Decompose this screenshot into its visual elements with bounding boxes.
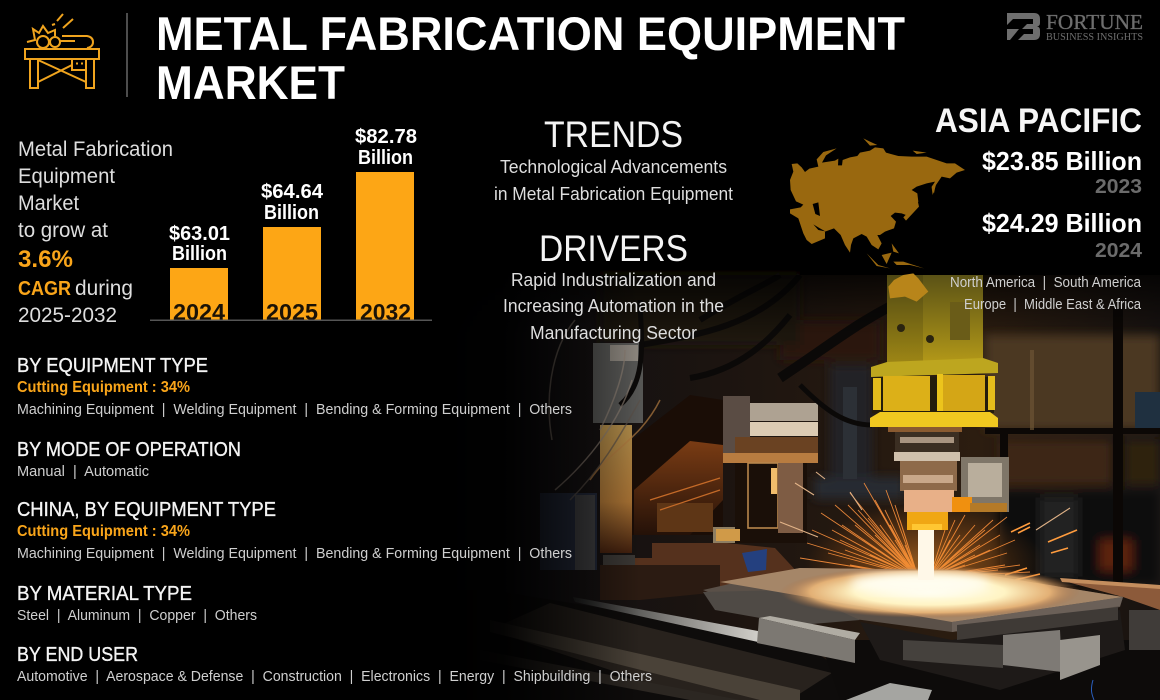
regional stats bbox=[935, 102, 1143, 313]
segment: by mode of operation: Manual | Automatic bbox=[17, 464, 149, 480]
sparks bbox=[780, 472, 1070, 577]
segment: by end user bbox=[17, 644, 652, 685]
base rails bbox=[440, 565, 1160, 700]
regional stats: 2023 bbox=[1095, 176, 1142, 198]
bar chart bbox=[150, 126, 432, 325]
trends bbox=[494, 114, 733, 204]
spark halo bbox=[805, 505, 1045, 625]
regional stats: ASIA PACIFIC bbox=[935, 102, 1142, 140]
text: market growth summary bbox=[18, 138, 173, 327]
photo: laser cutting machine bbox=[430, 275, 1160, 700]
bar chart: 2025 bbox=[266, 299, 318, 325]
logo: Fortune Business Insights: BUSINESS INSIGHTS bbox=[1046, 31, 1143, 43]
table under plate bbox=[757, 607, 1160, 700]
bar chart: $63.01 bbox=[169, 223, 230, 245]
drivers: Rapid Industrialization and bbox=[511, 270, 716, 290]
bar chart: $64.64 bbox=[261, 181, 324, 203]
segment: by equipment type bbox=[17, 355, 572, 418]
text: market growth summary: Market bbox=[18, 192, 79, 215]
segment: China by equipment type: Machining Equipment | Welding Equipment | Bending & Forming Equipment | Others bbox=[17, 546, 572, 562]
cables bbox=[620, 275, 907, 425]
title: MARKET bbox=[156, 56, 345, 109]
bar chart: 2024 bbox=[173, 299, 225, 325]
text: market growth summary: during bbox=[75, 277, 133, 300]
yellow laser head bbox=[870, 275, 1009, 580]
segment: by mode of operation bbox=[17, 439, 241, 480]
regional stats: $23.85 Billion bbox=[982, 146, 1142, 176]
bar chart: $82.78 bbox=[355, 126, 417, 148]
trends: in Metal Fabrication Equipment bbox=[494, 184, 733, 204]
trends: TRENDS bbox=[544, 114, 683, 155]
map: Asia Pacific bbox=[790, 138, 965, 302]
text: market growth summary: to grow at bbox=[18, 219, 108, 242]
trends: Technological Advancements bbox=[500, 157, 727, 177]
logo: Fortune Business Insights bbox=[1007, 10, 1143, 43]
regional stats: Europe | Middle East & Africa bbox=[964, 297, 1142, 313]
segment: by material type: BY MATERIAL TYPE bbox=[17, 583, 192, 605]
text: market growth summary: CAGR bbox=[18, 278, 71, 300]
left machine body bbox=[540, 343, 818, 597]
drivers: Manufacturing Sector bbox=[530, 323, 697, 343]
segment: by material type bbox=[17, 583, 257, 624]
regional stats: $24.29 Billion bbox=[982, 208, 1142, 238]
text: market growth summary: Metal Fabrication bbox=[18, 138, 173, 161]
top fade bbox=[430, 275, 1160, 335]
divider bbox=[126, 13, 128, 97]
regional stats: North America | South America bbox=[950, 275, 1142, 291]
text: market growth summary: 2025-2032 bbox=[18, 304, 117, 327]
segment: China by equipment type: Cutting Equipment : 34% bbox=[17, 523, 190, 540]
drivers: Increasing Automation in the bbox=[503, 296, 724, 316]
text: market growth summary: Equipment bbox=[18, 165, 115, 188]
segment: by equipment type: Cutting Equipment : 34% bbox=[17, 379, 190, 396]
drivers bbox=[503, 228, 724, 343]
cutting plate bbox=[703, 566, 1123, 632]
icon: saw table bbox=[25, 14, 99, 88]
segment: by equipment type: BY EQUIPMENT TYPE bbox=[17, 355, 208, 377]
drivers: DRIVERS bbox=[539, 228, 688, 269]
title: METAL FABRICATION EQUIPMENT bbox=[156, 7, 905, 60]
logo: Fortune Business Insights: FORTUNE bbox=[1046, 10, 1143, 34]
bar chart: Billion bbox=[358, 147, 413, 169]
text: market growth summary: 3.6% bbox=[18, 246, 73, 273]
fade overlay left bbox=[430, 275, 640, 700]
bar chart: Billion bbox=[172, 243, 227, 265]
bar chart: 2032 bbox=[360, 299, 411, 325]
bar chart: Billion bbox=[264, 202, 319, 224]
regional stats: 2024 bbox=[1095, 240, 1143, 262]
segment: China by equipment type bbox=[17, 499, 572, 562]
segment: by end user: BY END USER bbox=[17, 644, 138, 666]
segment: by equipment type: Machining Equipment | Welding Equipment | Bending & Forming Equipment | Others bbox=[17, 402, 572, 418]
segment: China by equipment type: CHINA, BY EQUIPMENT TYPE bbox=[17, 499, 276, 521]
segment: by end user: Automotive | Aerospace & Defense | Construction | Electronics | Energy | Shipbuilding | Others bbox=[17, 669, 652, 685]
segment: by material type: Steel | Aluminum | Copper | Others bbox=[17, 608, 257, 624]
segment: by mode of operation: BY MODE OF OPERATION bbox=[17, 439, 241, 461]
title bbox=[156, 7, 905, 109]
